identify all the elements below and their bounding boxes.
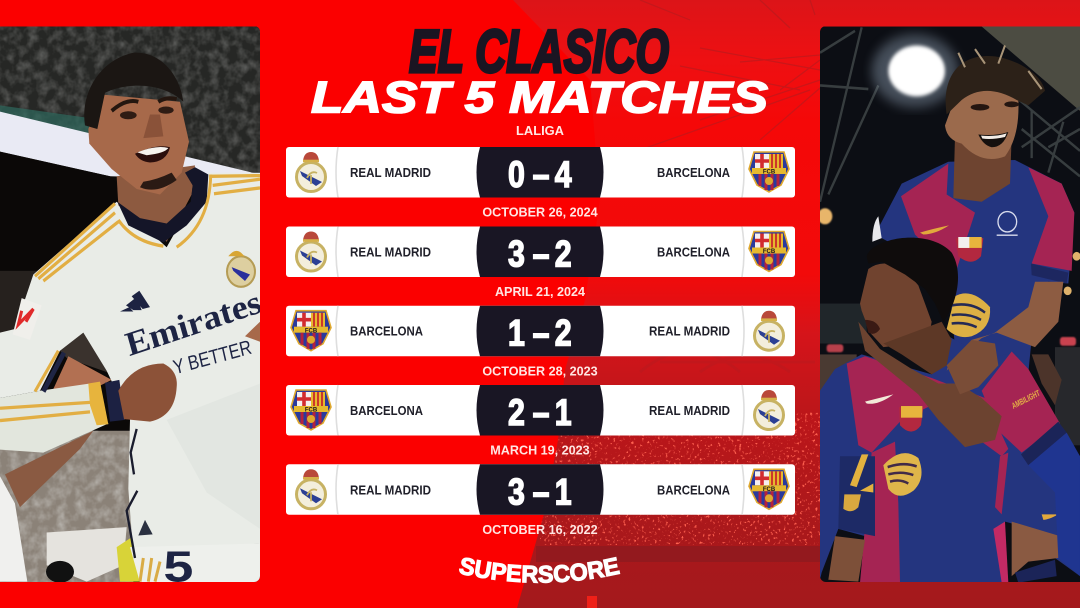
match row 3: REAL MADRID <box>649 325 730 339</box>
match row 2: 3–2 <box>508 234 572 275</box>
Balde body <box>820 336 1080 583</box>
crest: Barcelona <box>291 311 331 351</box>
Yamal arm around neck <box>858 282 1063 447</box>
match row 5: REAL MADRID <box>350 483 431 497</box>
gold shoulder stripes <box>0 176 260 421</box>
match row 5: BARCELONA <box>657 483 730 497</box>
background <box>513 0 1080 608</box>
cuffs <box>35 351 58 391</box>
date 1: OCTOBER 26, 2024 <box>482 206 598 220</box>
competition label: LALIGA <box>516 123 565 138</box>
jersey crest <box>956 237 983 262</box>
match row 1: REAL MADRID <box>350 166 431 180</box>
teammate arm and leg <box>5 431 93 507</box>
club crest on shirt <box>227 251 255 287</box>
lower crowd <box>0 431 140 583</box>
crest: Real Madrid <box>754 390 784 430</box>
LED advertising band <box>0 112 260 180</box>
crest: Barcelona <box>749 232 789 272</box>
right sleeve <box>1028 433 1080 576</box>
shirt number on teammate <box>850 454 873 493</box>
date 5: OCTOBER 16, 2022 <box>482 523 598 537</box>
date 3: OCTOBER 28, 2023 <box>482 364 598 378</box>
match row 3: 1–2 <box>508 313 572 354</box>
Yamal neck and head <box>945 45 1045 202</box>
sponsor text: Y BETTER <box>171 336 254 379</box>
Spotify logo top <box>947 293 990 337</box>
brand logo: SUPERSCORE <box>459 556 620 584</box>
crest: Real Madrid <box>754 311 784 350</box>
small crest on shorts <box>843 494 861 511</box>
crest: Real Madrid <box>296 232 326 271</box>
shorts number: 5 <box>163 542 193 591</box>
crest: Barcelona: FCB <box>763 487 776 493</box>
date 2: APRIL 21, 2024 <box>495 285 585 299</box>
stadium roof and truss <box>820 27 1080 202</box>
adidas logo <box>120 291 150 312</box>
match row 4: REAL MADRID <box>649 404 730 418</box>
crest: Barcelona: FCB <box>763 170 776 176</box>
Yamal arms and torso <box>872 160 1074 373</box>
match row 5: 3–1 <box>508 471 572 513</box>
background lights and crowd <box>818 208 1080 445</box>
photo: Real Madrid player celebrating <box>0 27 265 591</box>
white jersey <box>0 173 260 583</box>
match row 3: BARCELONA <box>350 325 423 339</box>
crest: Barcelona <box>749 152 789 192</box>
head <box>84 53 189 194</box>
match row 2: REAL MADRID <box>350 246 431 260</box>
crest: Barcelona: FCB <box>763 249 776 255</box>
fist <box>118 364 177 422</box>
crest: Barcelona <box>291 390 331 430</box>
match row 2 <box>286 226 795 277</box>
match row 4 <box>286 385 795 436</box>
mid crowd shadow <box>0 271 37 333</box>
match row 1: 0–4 <box>508 154 572 196</box>
sponsor text: Emirates <box>122 284 265 364</box>
match row 2: BARCELONA <box>657 246 730 260</box>
Balde crest <box>899 406 923 432</box>
match row 4: BARCELONA <box>350 404 423 418</box>
match row 1 <box>286 147 795 198</box>
crest: Barcelona: FCB <box>305 408 318 414</box>
league patch <box>14 298 34 330</box>
match row 5 <box>286 464 795 515</box>
side seam <box>127 429 137 558</box>
Ambilight sleeve text: AMBILIGHT <box>1010 387 1042 411</box>
crest: Real Madrid <box>296 469 326 509</box>
neck <box>117 165 195 242</box>
match row 1: BARCELONA <box>657 166 730 180</box>
match row 3 <box>286 306 795 356</box>
photo: Barcelona players celebrating <box>818 27 1080 583</box>
floodlight <box>872 35 958 107</box>
navy collar <box>117 167 208 242</box>
date 4: MARCH 19, 2023 <box>490 444 590 458</box>
title: LAST 5 MATCHES: LAST 5 MATCHES <box>311 74 768 122</box>
upper stadium crowd <box>0 27 260 172</box>
competition patch <box>997 212 1018 235</box>
crest: Real Madrid <box>296 152 326 192</box>
match row 4: 2–1 <box>508 392 572 434</box>
Balde head <box>860 238 958 374</box>
title: EL CLASICO: EL CLASICO <box>409 18 669 85</box>
crest: Barcelona: FCB <box>305 328 318 334</box>
crest: Barcelona <box>749 469 789 509</box>
Spotify logo bottom <box>883 453 922 496</box>
